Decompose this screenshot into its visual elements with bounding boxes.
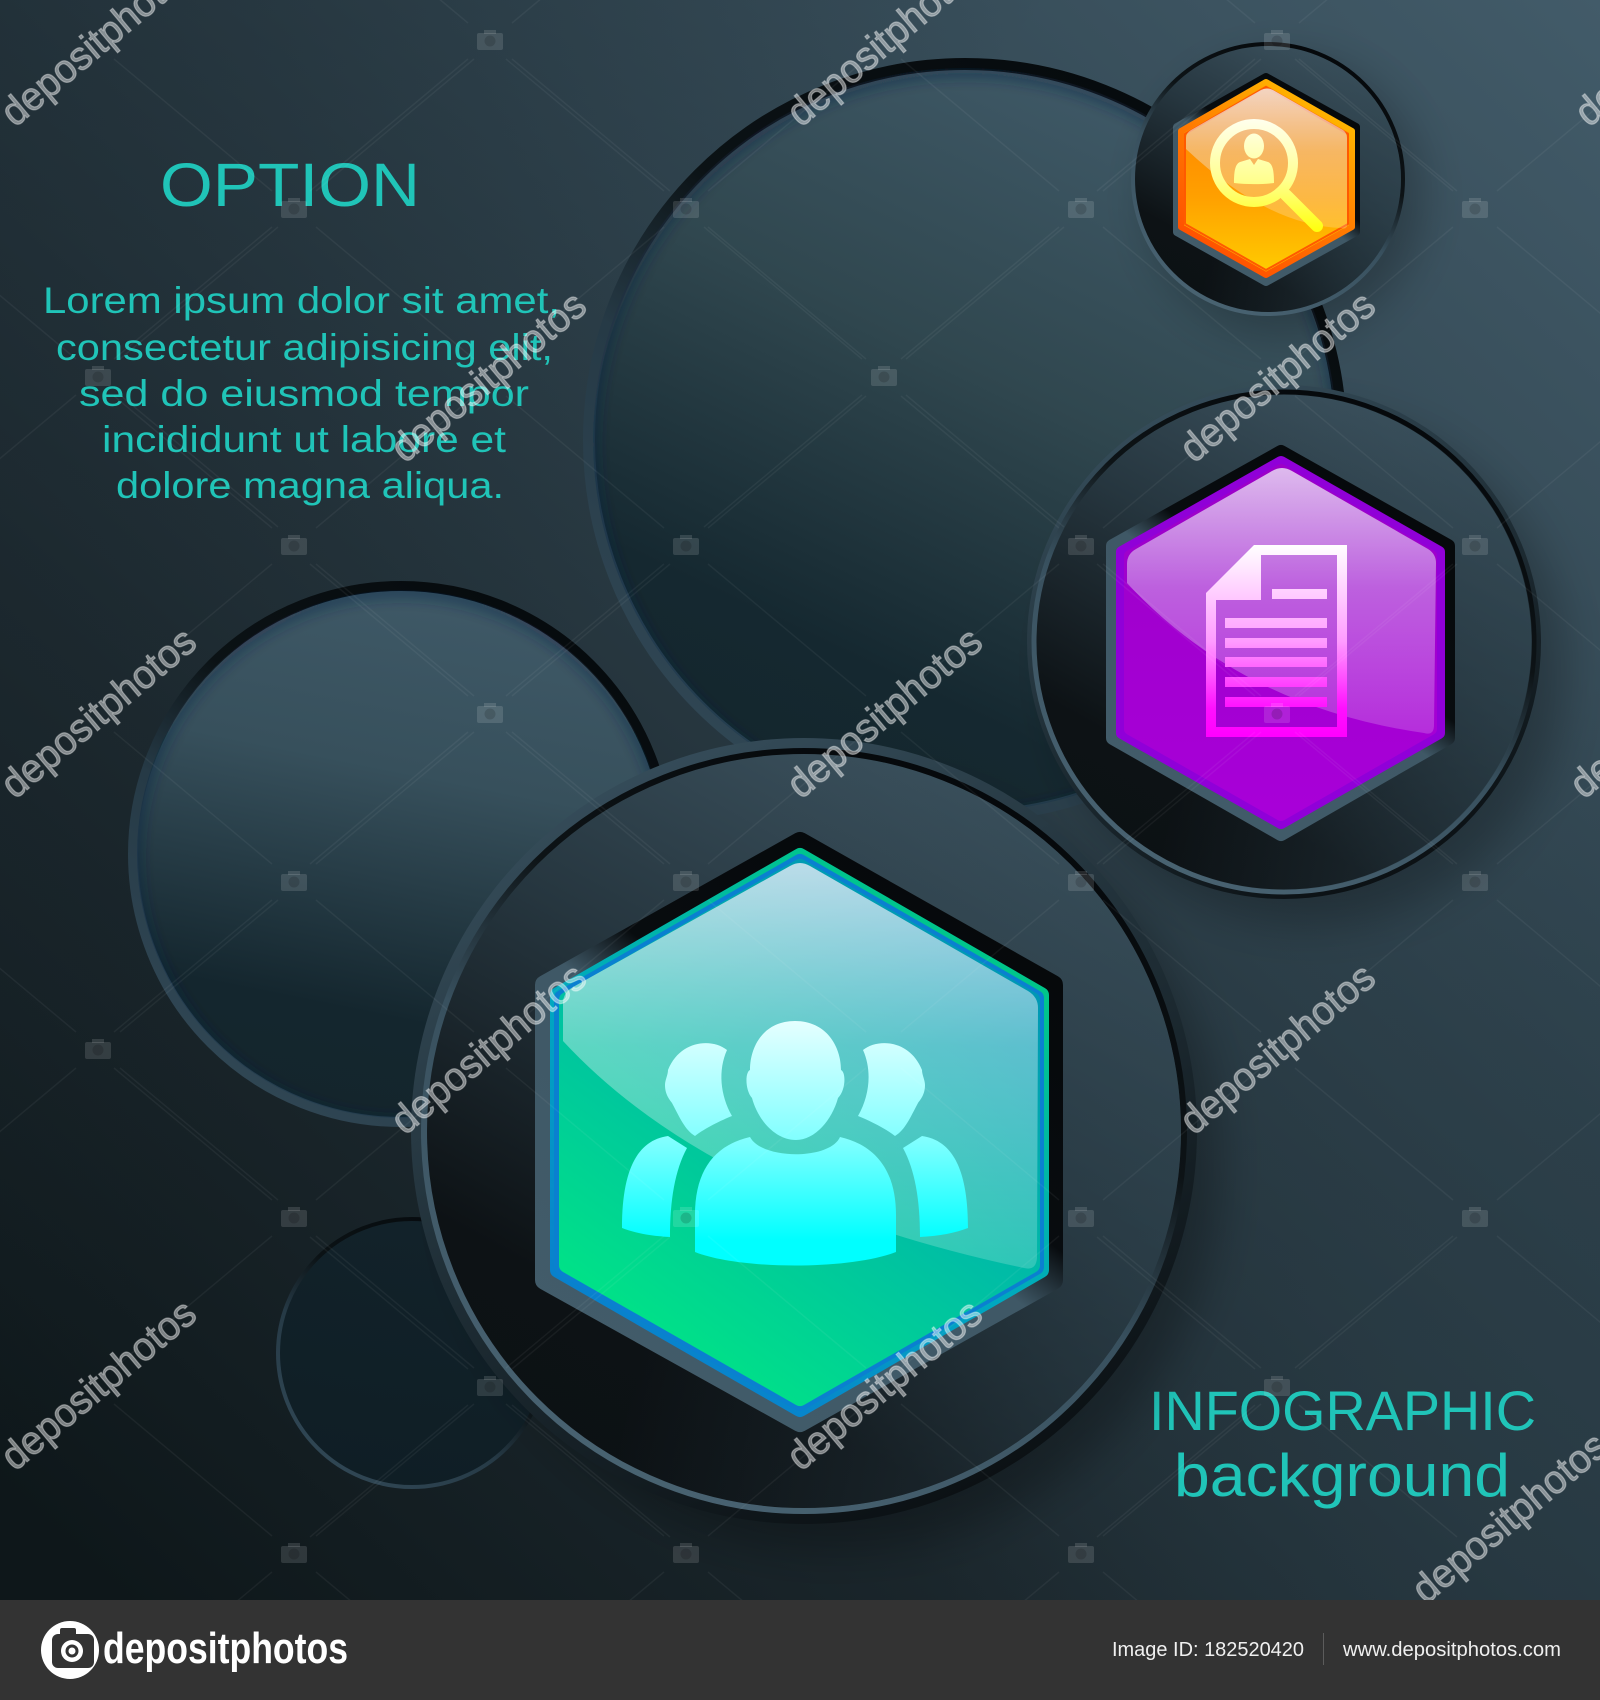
logo: camera roundel: [41, 1621, 99, 1679]
medium empty circle recess, left: [133, 586, 669, 1124]
infographic background caption: [1149, 1379, 1536, 1509]
body text block: consectetur adipisicing elit,: [56, 327, 553, 368]
depositphotos diagonal watermarks: depositphotos: [779, 1291, 991, 1479]
body text block: incididunt ut labore et: [102, 419, 507, 460]
body text block: [43, 280, 560, 506]
orange badge: search person: [1133, 44, 1423, 335]
small empty circle recess, bottom: [278, 1219, 546, 1487]
image id: Image ID: 182520420: [1112, 1639, 1304, 1661]
large empty circle recess, top: [589, 64, 1341, 819]
depositphotos diagonal watermarks: depositphotos: [1172, 955, 1384, 1143]
teal badge: team: [411, 738, 1220, 1550]
infographic background caption: background: [1174, 1442, 1510, 1509]
depositphotos diagonal watermarks: depositphotos: [383, 283, 595, 471]
purple badge: document: [1027, 385, 1565, 925]
website address: www.depositphotos.com: [1342, 1639, 1561, 1661]
icon: group of people: [622, 1021, 968, 1266]
body text block: dolore magna aliqua.: [116, 465, 504, 506]
icon: document: [1206, 545, 1347, 737]
body text block: sed do eiusmod tempor: [79, 373, 529, 414]
depositphotos diagonal watermarks: depositphotos: [1172, 283, 1384, 471]
footer bar: [0, 1600, 1600, 1700]
depositphotos diagonal watermarks: depositphotos: [383, 955, 595, 1143]
infographic background caption: INFOGRAPHIC: [1149, 1379, 1536, 1442]
depositphotos diagonal watermarks: depositphotos: [779, 619, 991, 807]
logo wordmark: depositphotos: [103, 1624, 348, 1673]
body text block: Lorem ipsum dolor sit amet,: [43, 280, 560, 321]
icon: magnifier with person: [1215, 124, 1317, 226]
option heading: OPTION: [160, 151, 420, 219]
